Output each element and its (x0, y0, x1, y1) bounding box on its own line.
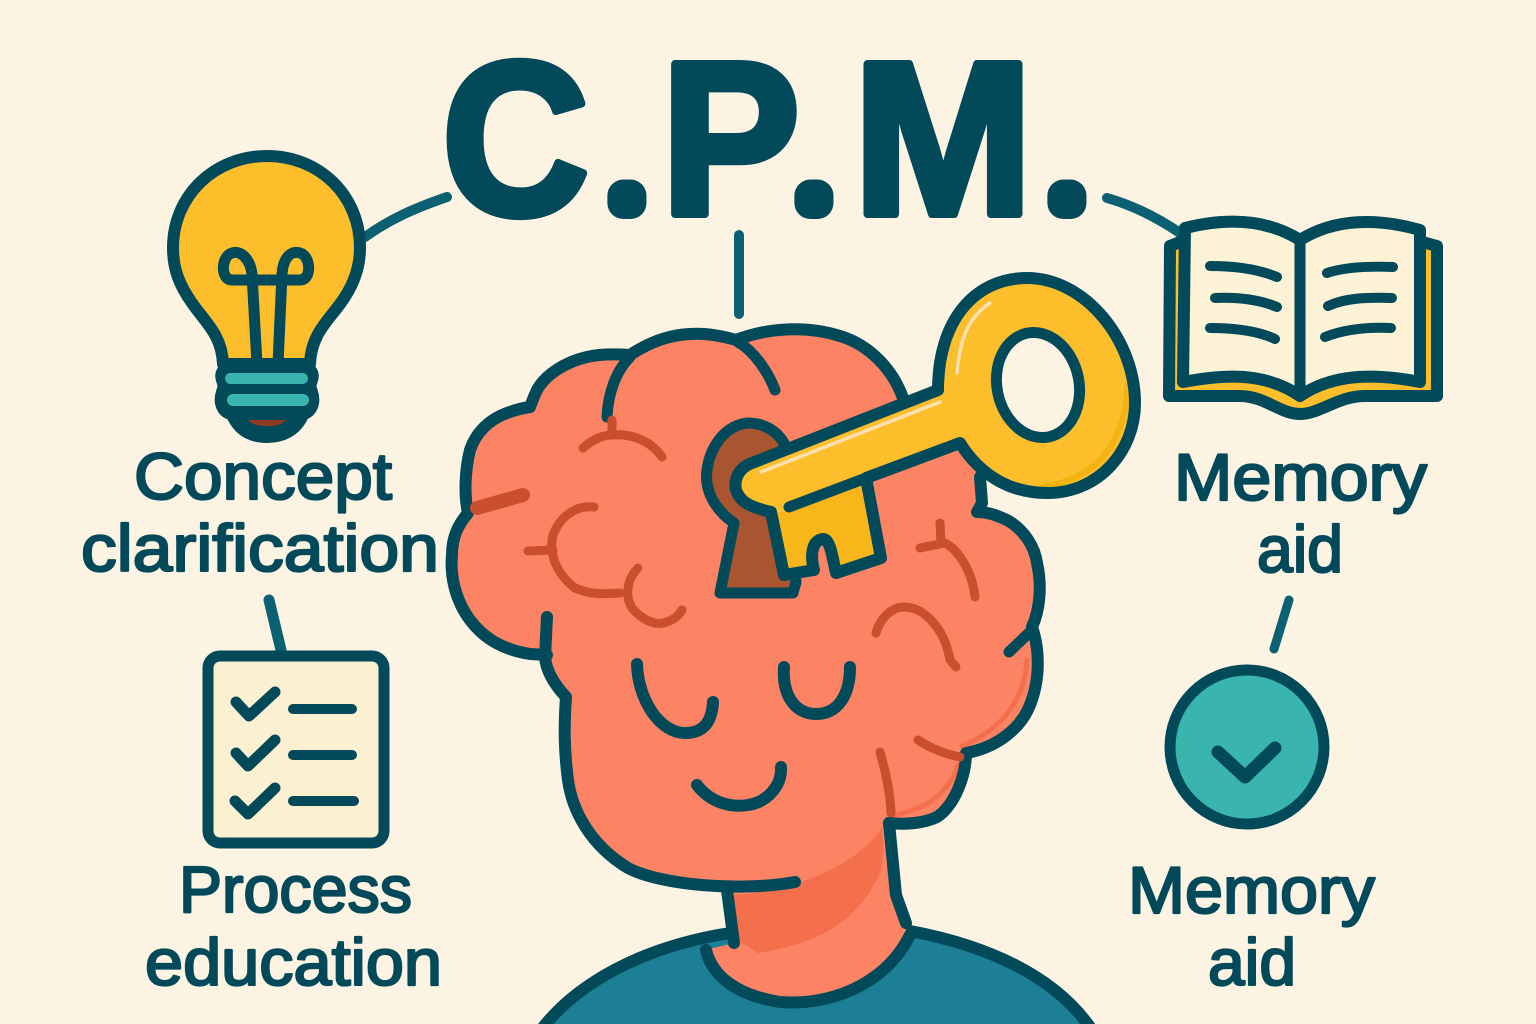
label: memory aid (top): Memory (1174, 440, 1427, 514)
title: P (661, 18, 800, 261)
keyhole (707, 423, 796, 593)
label: memory aid (bottom) (1128, 853, 1375, 999)
key bit shading (775, 480, 880, 574)
title (442, 18, 1074, 261)
left eye (637, 664, 713, 733)
key (736, 278, 1135, 575)
label: process education (145, 852, 442, 999)
title: M (853, 18, 1033, 261)
label: process education: Process (179, 852, 412, 926)
label: memory aid (top): aid (1257, 512, 1343, 586)
brain and head fill (452, 329, 1040, 887)
mouth (697, 767, 781, 806)
brain outline (452, 329, 903, 655)
title: . (620, 158, 634, 214)
wrinkles (528, 420, 975, 813)
icon: check circle (1170, 670, 1324, 824)
key shaft line (789, 478, 866, 507)
key outline (736, 278, 1135, 575)
right lobes outline (889, 477, 1040, 824)
lobe shading (895, 660, 1027, 815)
icon: light bulb (173, 156, 360, 437)
neck outlines (727, 823, 906, 943)
title: C (442, 18, 589, 261)
neck (705, 815, 910, 1002)
label: memory aid (bottom): aid (1208, 925, 1296, 999)
figure: person with brain (452, 278, 1135, 1024)
title: . (1060, 158, 1074, 214)
face outline (545, 617, 795, 887)
label: concept clarification: Concept (134, 439, 392, 513)
icon: checklist (208, 656, 384, 843)
collar (706, 935, 910, 1002)
inner brain folds (607, 342, 1032, 652)
connector: concept label to checklist (269, 600, 281, 650)
icon: open book (1169, 222, 1437, 414)
label: concept clarification (81, 439, 439, 585)
right eye (784, 667, 850, 714)
key hole (987, 325, 1089, 445)
connector: title to head (734, 235, 744, 314)
label: concept clarification: clarification (81, 511, 439, 585)
connector: title to book (1107, 198, 1180, 233)
title: . (807, 158, 821, 214)
label: process education: education (145, 925, 442, 999)
label: memory aid (bottom): Memory (1128, 853, 1375, 927)
neck shadow (734, 827, 883, 953)
connector: title to bulb (365, 197, 447, 237)
key highlight (761, 303, 990, 472)
brain crease (477, 495, 523, 508)
label: memory aid (top) (1174, 440, 1427, 586)
key ring shading (1043, 385, 1127, 486)
connector: memory label to circle (1274, 600, 1289, 649)
shirt (541, 931, 1092, 1024)
